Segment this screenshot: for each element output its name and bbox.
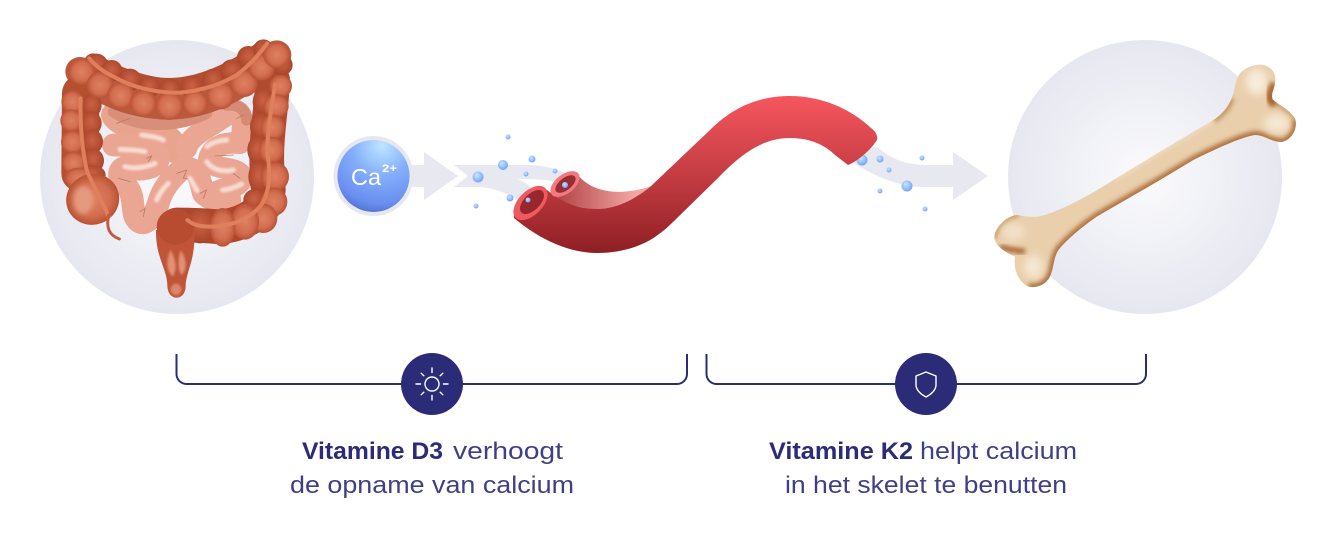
icon: sun [401,353,463,415]
illustration: intestines [59,39,293,298]
text: vitamin D3: de opname van calcium [290,472,574,499]
vessel opening upper [546,166,584,202]
icon: shield [895,353,957,415]
rear colon segments [78,39,293,243]
arrow: calcium into blood vessel [410,152,574,208]
text: vitamin K2: Vitamine K2 [769,438,913,465]
illustration: blood vessel [507,96,877,253]
text: vitamin K2: in het skelet te benutten [785,472,1067,499]
icon: calcium ion [334,136,414,216]
icon: calcium ion: Ca [351,164,381,190]
vessel main body [514,96,877,253]
bracket: vitamin K2 [706,353,1146,415]
text: vitamin D3 [290,438,574,499]
small intestine [113,105,247,223]
panel: bone [994,40,1296,314]
front colon segments [59,42,292,247]
vessel opening lower [507,180,554,226]
vessel back branch [552,175,652,210]
rectum [156,209,194,298]
text: vitamin D3: verhoogt [453,438,563,465]
icon: calcium ion: 2+ [382,163,397,175]
background disc left [40,40,314,314]
cecum highlight [73,186,93,214]
arrow: calcium towards bone [848,147,988,200]
illustration: femur bone [994,65,1296,287]
text: vitamin D3: Vitamine D3 [302,438,443,465]
colon bands [81,43,275,227]
bracket: vitamin D3 [176,353,687,415]
panel: intestine [40,39,314,314]
text: vitamin K2 [769,438,1077,499]
calcium particles [472,134,928,212]
bone shading [994,68,1296,287]
background disc right [1008,40,1282,314]
appendix [108,215,119,239]
colon base [80,49,277,227]
text: vitamin K2: helpt calcium [920,438,1077,465]
